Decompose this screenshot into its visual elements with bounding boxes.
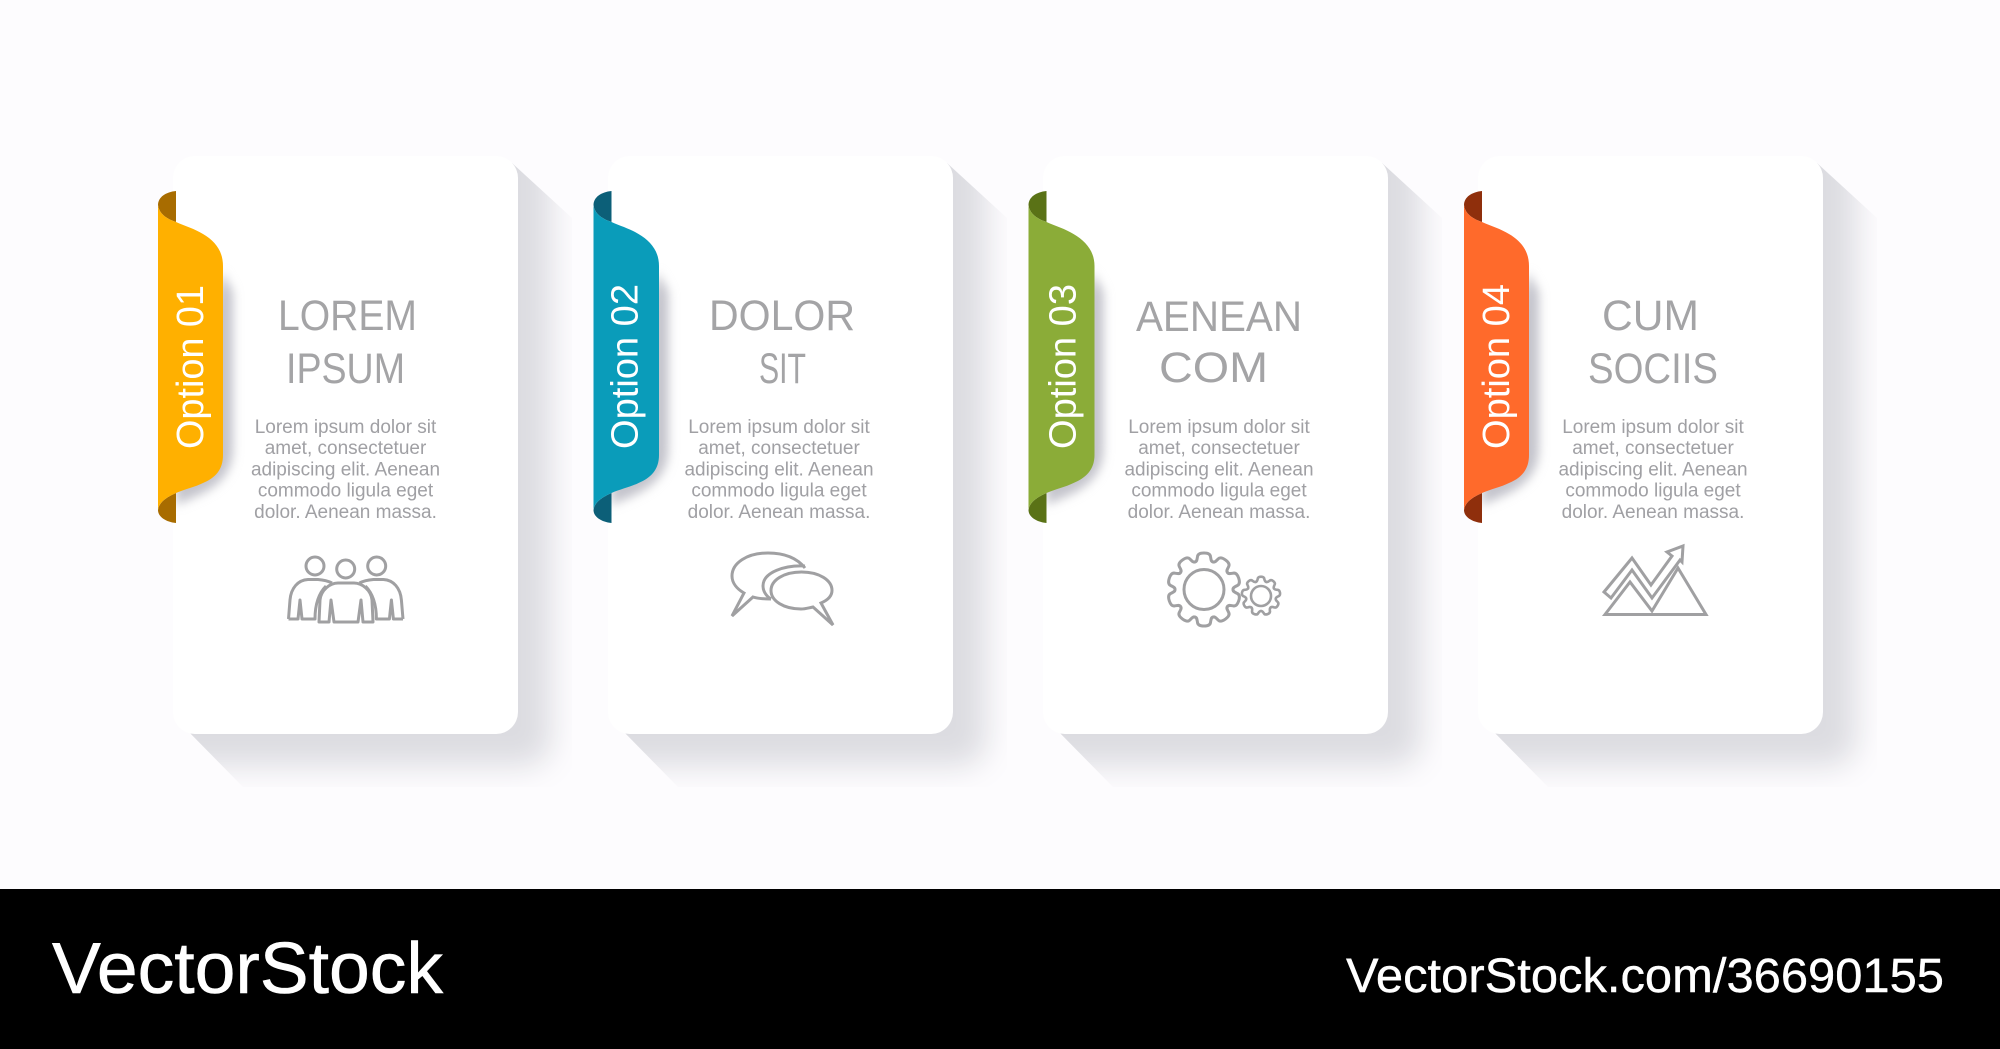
body text 4: commodo ligula eget [1565,481,1741,502]
ribbon: Option 03 [1028,191,1104,523]
icon: rising chart over mountains [1604,546,1706,614]
heading: LOREM IPSUM: IPSUM [286,345,405,393]
body text 2: adipiscing elit. Aenean [684,460,874,480]
body text 2: Lorem ipsum dolor sit [688,417,871,438]
icon: speech bubbles [732,553,833,625]
card 2 sheet with shadow [608,156,1007,787]
body text 4: dolor. Aenean massa. [1562,502,1744,523]
body text 3: adipiscing elit. Aenean [1124,460,1314,480]
body text 3: Lorem ipsum dolor sit [1128,417,1311,438]
body text 3: commodo ligula eget [1131,481,1307,502]
body text 2: amet, consectetuer [698,438,860,459]
body text 1: adipiscing elit. Aenean [251,460,440,480]
body text 1: dolor. Aenean massa. [254,502,437,523]
heading: CUM SOCIIS [1588,292,1718,393]
body text 4: adipiscing elit. Aenean [1558,460,1748,480]
icon: people [288,557,403,622]
body text 3: amet, consectetuer [1138,438,1300,459]
panel: card 1 [158,156,572,787]
ribbon: Option 01: Option 01 [170,285,212,449]
heading: AENEAN COM [1136,293,1302,392]
heading: CUM SOCIIS: CUM [1602,292,1699,340]
panel: card 3 [1028,156,1442,787]
icon: gears [1167,553,1281,626]
heading: DOLOR SIT: DOLOR [709,292,855,340]
panel: card 4 [1464,156,1877,787]
body text 2: commodo ligula eget [691,481,867,502]
heading: LOREM IPSUM [278,292,417,393]
panel: card 2 [594,156,1007,787]
body text 2: dolor. Aenean massa. [688,502,870,523]
ribbon: Option 01 [158,191,233,523]
ribbon: Option 02 [594,191,668,523]
body text 4: Lorem ipsum dolor sit [1562,417,1745,438]
heading: CUM SOCIIS: SOCIIS [1588,345,1718,393]
card 1 sheet with shadow [173,156,572,787]
heading: AENEAN COM: COM [1159,344,1268,392]
ribbon: Option 04: Option 04 [1476,284,1518,449]
heading: DOLOR SIT [709,292,855,393]
card 4 sheet with shadow [1478,156,1877,787]
heading: AENEAN COM: AENEAN [1136,293,1302,341]
body text 1: commodo ligula eget [258,481,434,502]
footer url: VectorStock.com/36690155 [1346,950,1944,1003]
ribbon: Option 03: Option 03 [1042,284,1084,449]
ribbon: Option 02: Option 02 [604,284,646,449]
body text 1: Lorem ipsum dolor sit [255,417,437,438]
body text 4: amet, consectetuer [1572,438,1734,459]
heading: LOREM IPSUM: LOREM [278,292,417,340]
body text 3: dolor. Aenean massa. [1128,502,1310,523]
card 3 sheet with shadow [1043,156,1442,787]
heading: DOLOR SIT: SIT [759,345,806,393]
footer bar [0,889,2000,1049]
footer brand: VectorStock [52,929,444,1009]
ribbon: Option 04 [1464,191,1539,523]
body text 1: amet, consectetuer [265,438,427,459]
